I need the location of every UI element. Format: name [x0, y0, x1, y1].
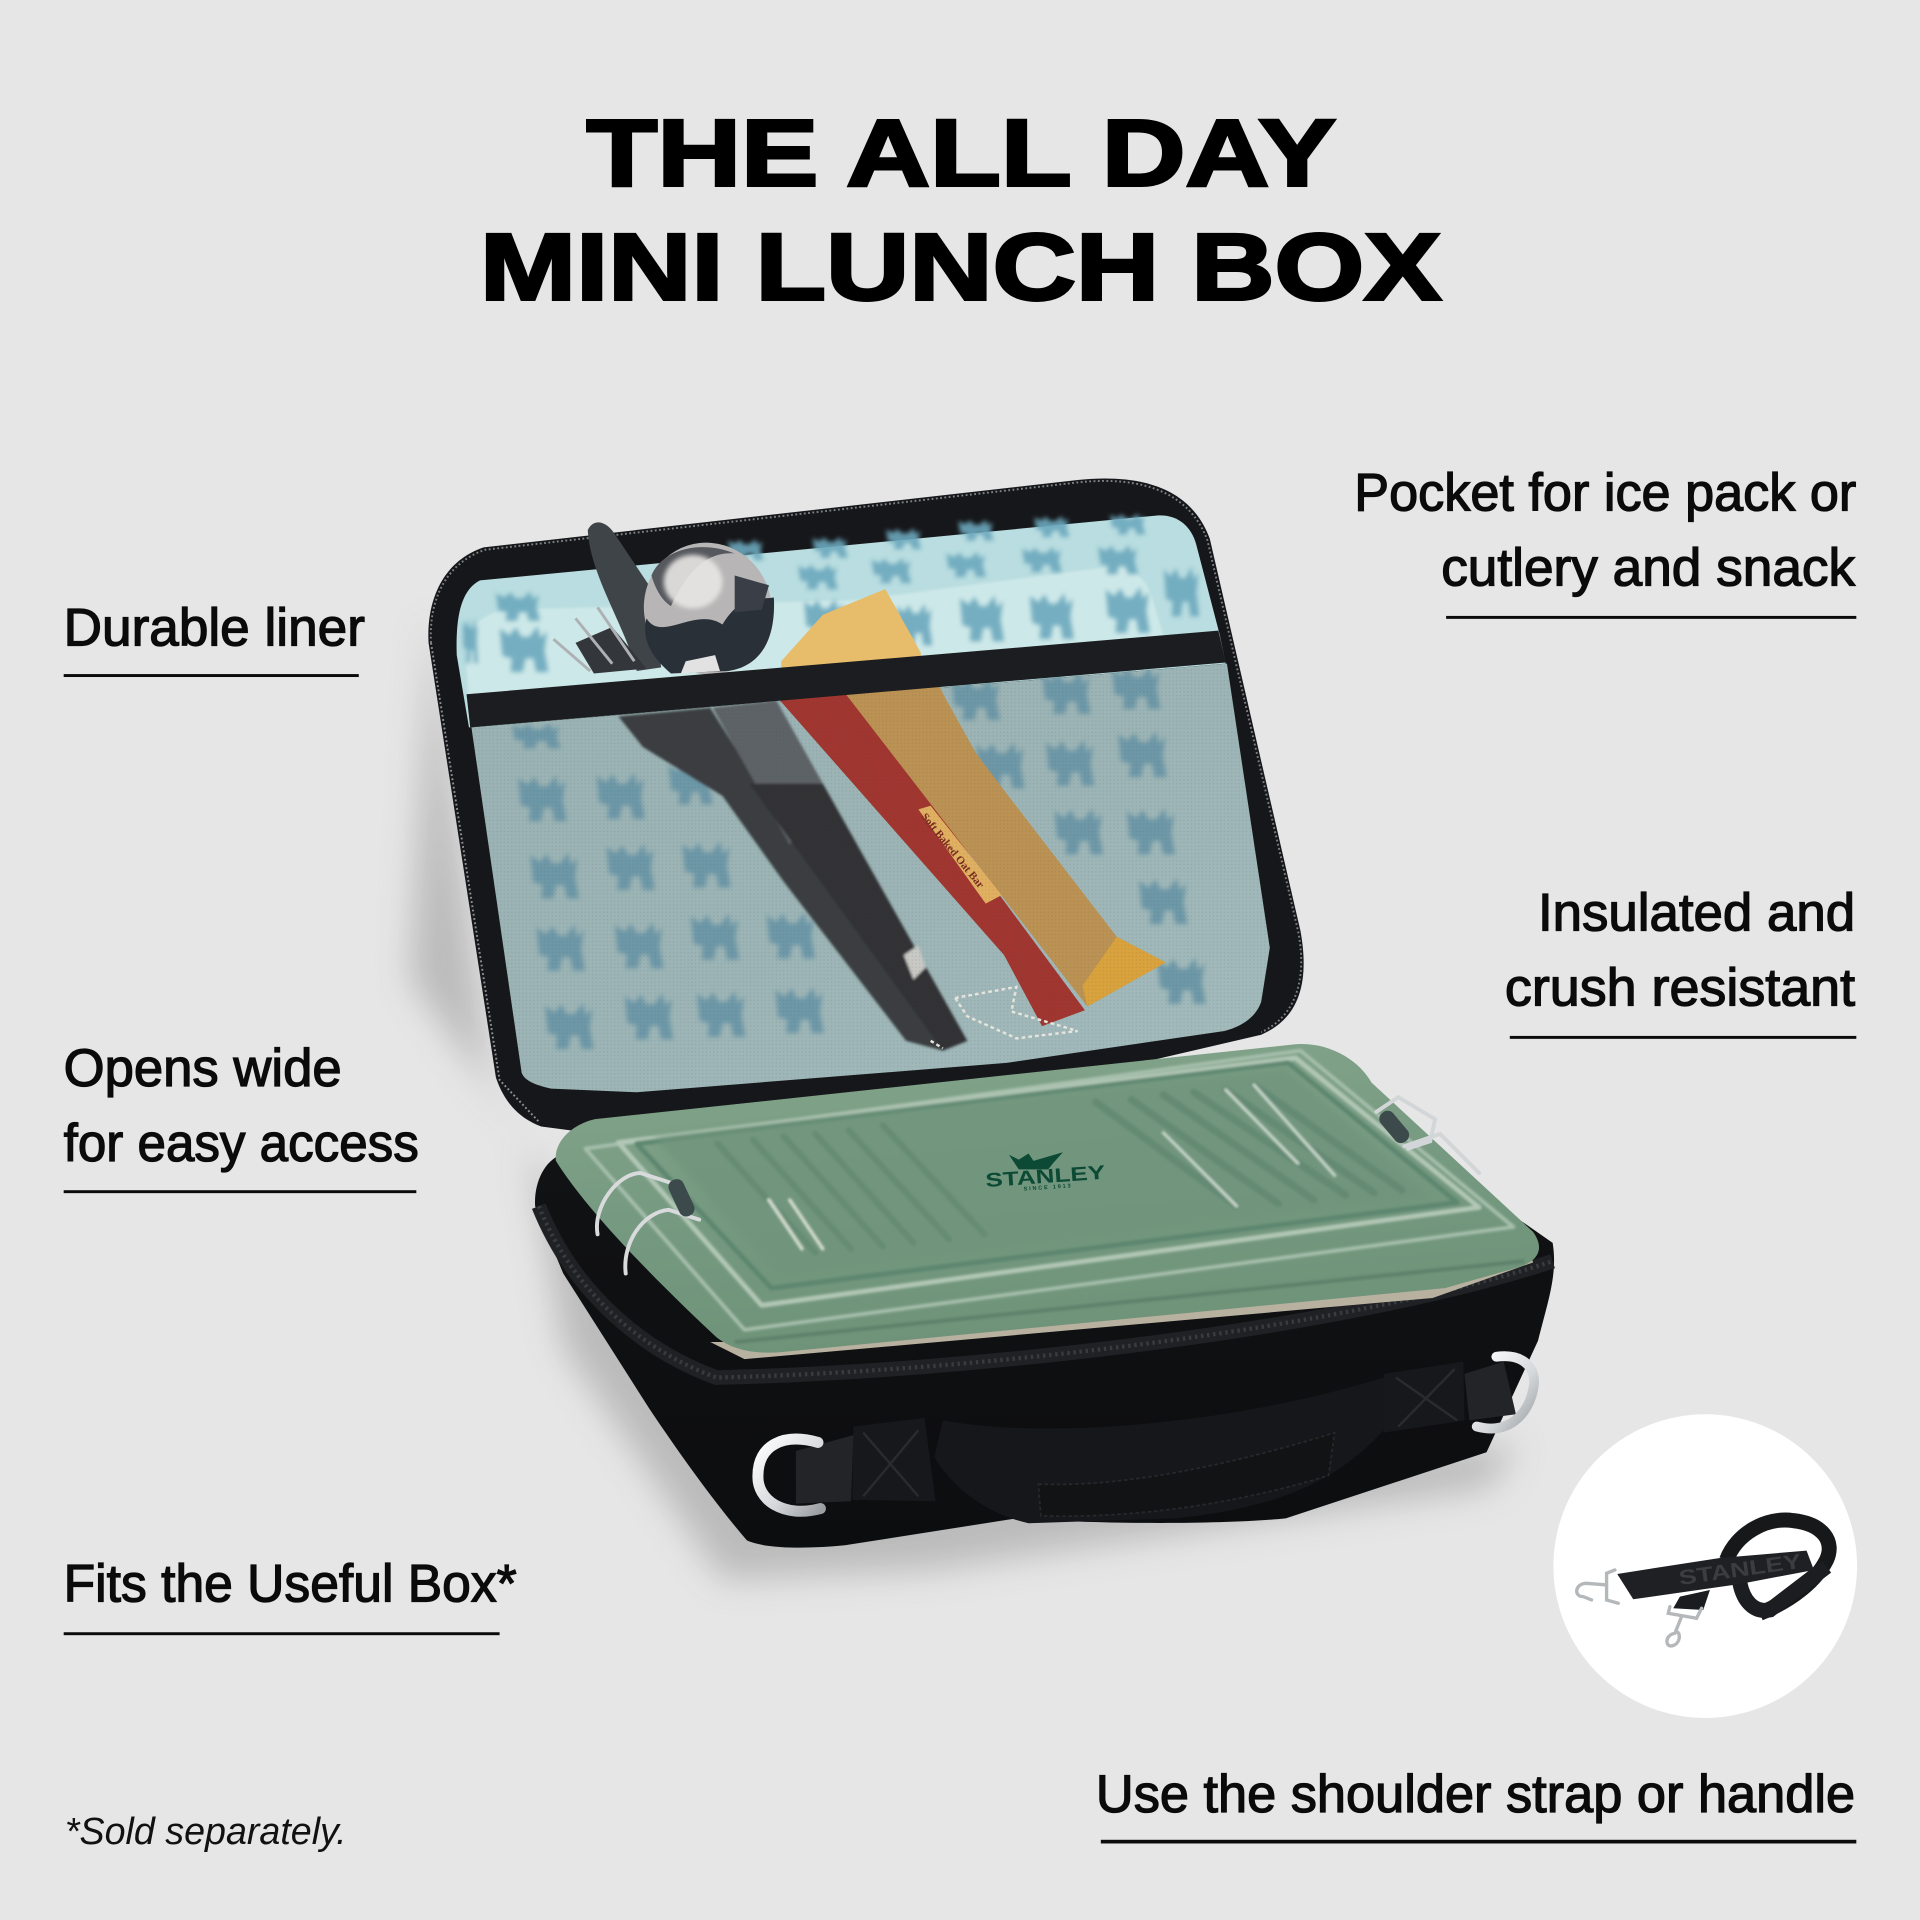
fork [553, 607, 647, 673]
callout: fits the useful box: Fits the Useful Box* [64, 1555, 517, 1614]
raised panel [654, 1067, 1433, 1277]
spoon [627, 526, 789, 691]
right D-ring [1477, 1356, 1534, 1428]
footnote: *Sold separately. [65, 1811, 347, 1853]
snack label: Soft Baked Oat Bar [918, 811, 986, 891]
lid zipper left side [431, 643, 539, 1122]
callout: insulated: crush resistant [1505, 958, 1855, 1017]
mesh pocket [471, 664, 1270, 1092]
strap lower loop [1740, 1567, 1827, 1610]
teal liner [457, 515, 1226, 727]
handle patch [1038, 1433, 1335, 1516]
left handle tab [852, 1418, 936, 1501]
shoulder strap: STANLEY [1677, 1550, 1803, 1590]
box body [535, 1065, 1554, 1548]
right strap loop [1464, 1362, 1516, 1420]
cutlery carabiner [931, 987, 1078, 1048]
lid ribs [718, 1085, 1402, 1253]
title: MINI LUNCH BOX [480, 214, 1441, 319]
callout: opens wide: Opens wide [64, 1039, 342, 1098]
liner tray [465, 567, 1166, 722]
snack bar red side [779, 693, 1085, 1026]
stanley logo [985, 1152, 1106, 1193]
left clip [597, 1173, 699, 1273]
useful box rim [710, 1254, 1533, 1359]
title: THE ALL DAY [587, 101, 1336, 206]
strap main band [1617, 1551, 1814, 1599]
callout: pocket: Pocket for ice pack or [1354, 464, 1856, 523]
open lid shell [428, 478, 1304, 1133]
mesh lion pattern [512, 667, 1206, 1049]
lid zipper [431, 481, 1301, 1032]
left D-ring [758, 1439, 820, 1511]
snack bar end crimp [1082, 937, 1166, 1007]
strap inset circle [1553, 1414, 1857, 1718]
liner lion pattern [462, 514, 1199, 672]
right handle tab [1384, 1362, 1464, 1433]
stanley logo: STANLEY [985, 1162, 1106, 1192]
right clip [1376, 1097, 1479, 1173]
box zipper [539, 1206, 1553, 1378]
mesh weave [471, 664, 1270, 1092]
callout: insulated: Insulated and [1538, 884, 1855, 943]
stanley logo: SINCE 1913 [1023, 1183, 1073, 1193]
snack label [918, 806, 1002, 904]
product: lunch box [428, 478, 1304, 1133]
left strap loop [796, 1435, 853, 1504]
handle [934, 1378, 1384, 1523]
product shadow [410, 612, 1518, 1580]
callout: shoulder strap: Use the shoulder strap or handle [1096, 1765, 1855, 1824]
callout: opens wide: for easy access [64, 1114, 419, 1173]
callout: pocket: cutlery and snack [1441, 538, 1856, 597]
lower box [535, 1044, 1554, 1548]
shoulder strap [1577, 1520, 1829, 1646]
snack bar top [781, 589, 921, 686]
callout: opens wide [64, 1039, 419, 1193]
cutlery handles [618, 700, 967, 1051]
title [480, 101, 1441, 319]
callout: insulated [1505, 884, 1856, 1039]
green useful box [556, 1044, 1539, 1353]
strap lower tail [1673, 1590, 1710, 1610]
callout: durable liner: Durable liner [64, 598, 365, 657]
lid contour steps [585, 1051, 1524, 1342]
strap coil [1727, 1520, 1829, 1613]
callout: pocket [1354, 464, 1856, 619]
pocket band [467, 631, 1226, 727]
snack bar gold side [845, 686, 1166, 1007]
clasps [1577, 1570, 1702, 1646]
zipper teeth [539, 1206, 1553, 1378]
knife blade [588, 522, 661, 671]
